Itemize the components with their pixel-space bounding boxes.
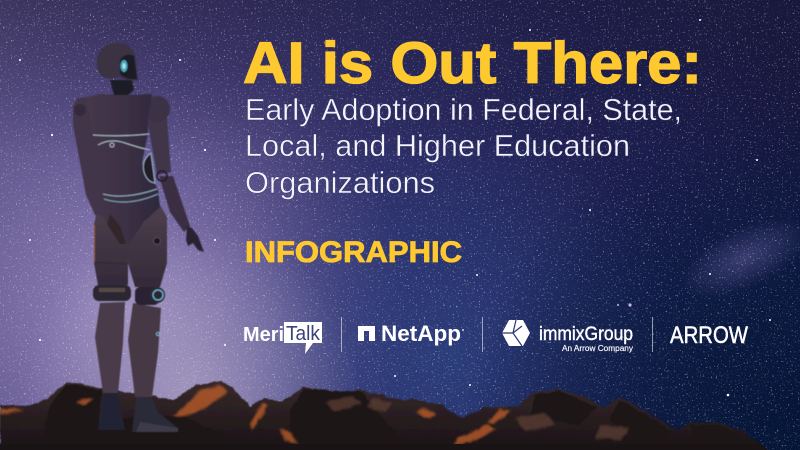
logo: MeriTalk: Talk <box>286 323 321 345</box>
logo: Arrow: ARROW <box>670 322 748 349</box>
shadowed ridges <box>40 384 765 450</box>
robot left leg <box>93 205 131 393</box>
robot neck <box>110 80 134 95</box>
logo: NetApp: NetApp <box>381 321 461 346</box>
logo: MeriTalk: Meri <box>243 324 284 346</box>
robot torso <box>86 94 160 245</box>
robot right arm <box>144 96 190 232</box>
subtitle: Local, and Higher Education <box>245 128 630 163</box>
robot right leg <box>125 205 167 397</box>
logo: immixGroup: An Arrow Company <box>562 343 634 353</box>
subtitle: Organizations <box>245 165 435 200</box>
mountain range <box>0 381 768 450</box>
infographic label: INFOGRAPHIC <box>245 236 462 269</box>
robot head <box>97 43 138 80</box>
logo: immixGroup <box>502 320 634 353</box>
title: AI is Out There: <box>243 31 702 96</box>
logo: immixGroup: immixGroup <box>539 324 633 345</box>
subtitle: Early Adoption in Federal, State, <box>245 92 682 127</box>
orange sunlit rock highlights <box>0 385 510 446</box>
divider <box>482 317 483 352</box>
logo: MeriTalk <box>243 322 322 354</box>
robot feet <box>98 393 178 432</box>
robot figure <box>73 43 204 432</box>
robot hand <box>186 226 204 252</box>
divider <box>341 317 342 352</box>
subtitle <box>245 92 682 200</box>
robot left arm <box>73 97 106 216</box>
divider <box>652 317 653 352</box>
logo row <box>243 317 748 354</box>
